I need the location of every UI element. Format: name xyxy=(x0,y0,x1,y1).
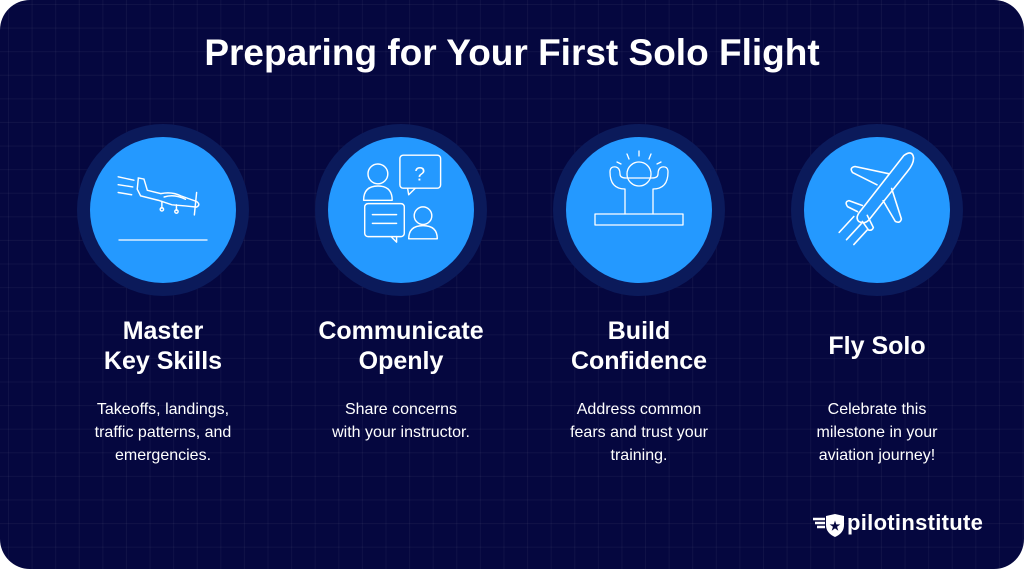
title: Preparing for Your First Solo Flight xyxy=(204,32,820,73)
icon: conversation: ? xyxy=(414,163,425,185)
heading: Master xyxy=(123,317,203,345)
panel: fly solo xyxy=(791,124,963,464)
panel: communicate openly xyxy=(315,124,487,441)
panel: master key skills xyxy=(77,124,249,464)
heading: Confidence xyxy=(571,347,707,375)
heading xyxy=(318,317,484,375)
text xyxy=(570,401,708,464)
icon: cheering person xyxy=(553,124,725,296)
logo: pilotinstitute: ★ xyxy=(830,519,841,533)
text: training. xyxy=(611,447,667,464)
text: Takeoffs, landings, traffic patterns, and emergencies. xyxy=(95,401,231,464)
logo: pilotinstitute: pilotinstitute xyxy=(847,510,983,535)
heading xyxy=(571,317,707,375)
heading: Communicate xyxy=(318,317,484,345)
icon: jet plane xyxy=(791,124,963,296)
heading: Build xyxy=(608,317,670,345)
text: with your instructor. xyxy=(332,424,470,441)
text: Celebrate this milestone in your aviation journey! xyxy=(817,401,937,464)
text: fears and trust your xyxy=(570,424,708,441)
heading: Fly Solo xyxy=(828,332,926,360)
heading: Key Skills xyxy=(104,347,222,375)
text: Address common xyxy=(577,401,701,418)
heading xyxy=(104,317,222,375)
icon: takeoff plane xyxy=(77,124,249,296)
text: Share concerns xyxy=(345,401,457,418)
heading: Openly xyxy=(359,347,443,375)
text xyxy=(332,401,470,441)
panel: build confidence xyxy=(553,124,725,464)
icon: conversation xyxy=(315,124,487,296)
